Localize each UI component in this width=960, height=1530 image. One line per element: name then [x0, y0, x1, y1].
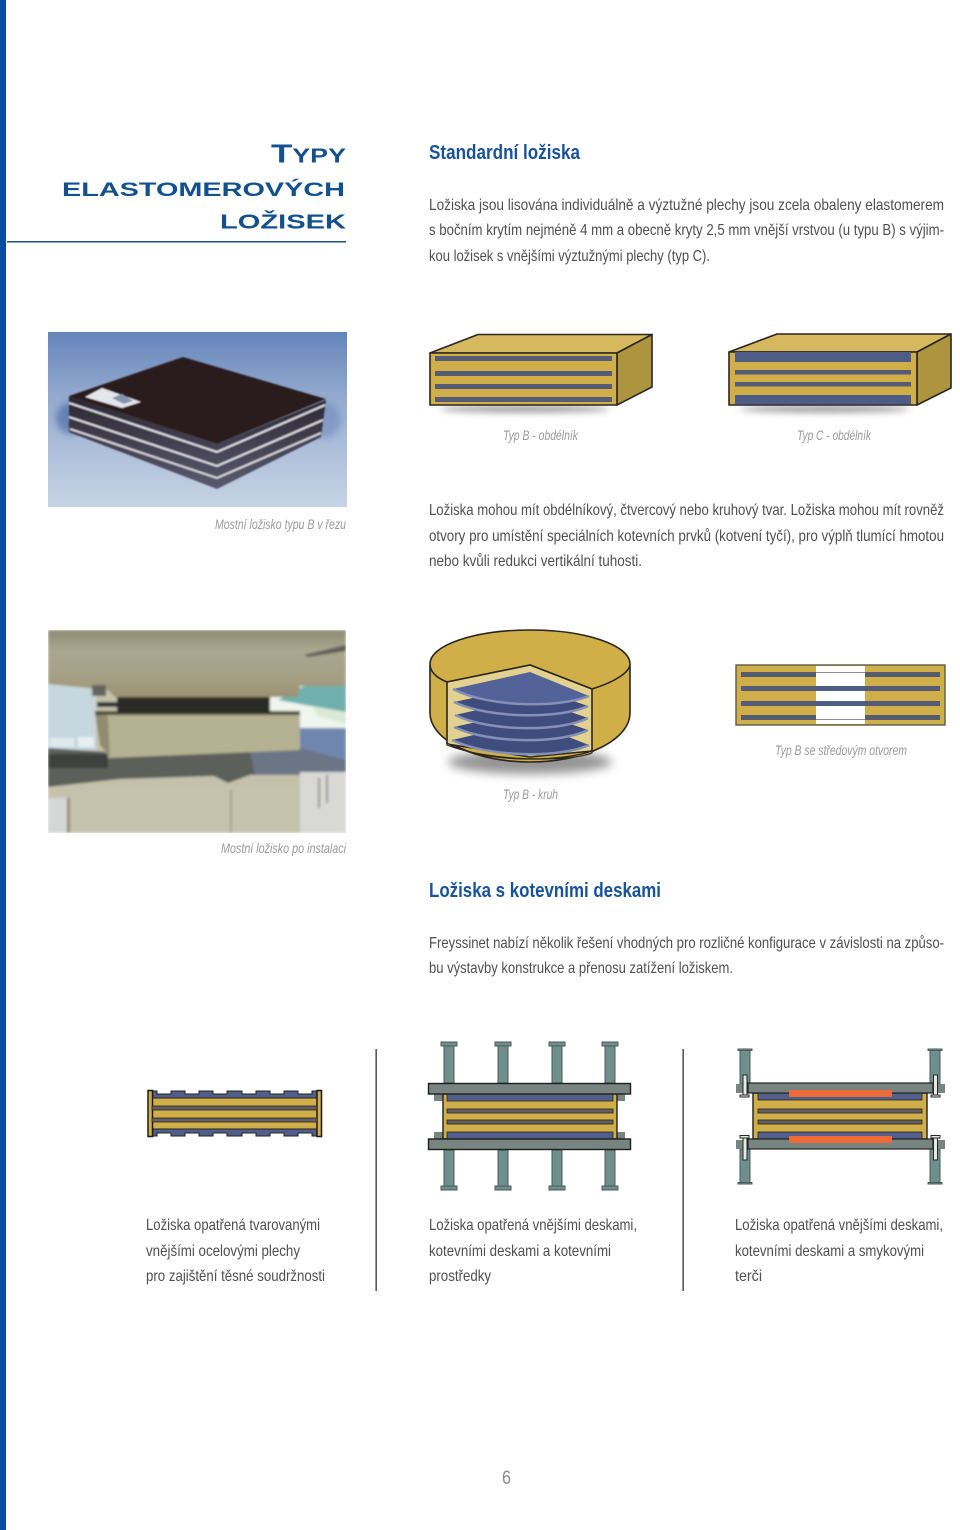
shear plate top [789, 1090, 892, 1097]
caption: photo 1: Mostní ložisko typu B v řezu [215, 516, 346, 532]
left page bar [0, 0, 6, 1530]
text block: intro: kou ložisek s vnějšími výztužnými plechy (typ C). [429, 248, 710, 265]
text block: anchor plates intro [429, 934, 944, 977]
text block: column 2: kotevními deskami a kotevními [429, 1243, 611, 1260]
heading: standard bearings: Standardní ložiska [429, 142, 581, 164]
caption: photo 2: Mostní ložisko po instalaci [221, 840, 347, 856]
divider 2 [682, 1049, 684, 1291]
diagram: type B rectangle [430, 334, 652, 412]
diagram: type B circular cutaway [430, 630, 630, 774]
diagram: type C rectangle [729, 334, 951, 412]
caption: type B with central hole: Typ B se středovým otvorem [775, 742, 907, 758]
text block: column 3: terči [735, 1268, 762, 1285]
shear plate bottom [789, 1136, 892, 1143]
text block: shapes [429, 502, 944, 570]
text block: intro [429, 197, 944, 265]
diagram: bearing with anchor plates and anchors [428, 1042, 630, 1190]
heading: bearings with anchor plates: Ložiska s kotevními deskami [429, 880, 661, 902]
title underline [7, 241, 346, 242]
text block: column 3: kotevními deskami a smykovými [735, 1243, 924, 1260]
text block: column 1: Ložiska opatřená tvarovanými [146, 1217, 320, 1234]
diagram: bearing with profiled outer plates [148, 1090, 322, 1136]
text block: column 3 [735, 1217, 943, 1285]
text block: column 1: vnějšími ocelovými plechy [146, 1243, 300, 1260]
caption: type C rectangle: Typ C - obdélník [797, 427, 872, 443]
text block: anchor plates intro: bu výstavby konstrukce a přenosu zatížení ložiskem. [429, 960, 733, 977]
text block: shapes: nebo kvůli redukci vertikální tuhosti. [429, 552, 642, 570]
text block: column 2: prostředky [429, 1268, 491, 1285]
diagram: type B with central hole [736, 665, 945, 725]
page number: 6 [502, 1468, 511, 1489]
title: LOŽISEK [220, 210, 347, 234]
diagram: bearing with anchor plates and shear studs [736, 1049, 945, 1184]
photo: type B bearing section [48, 332, 347, 507]
caption: type B circle: Typ B - kruh [503, 786, 558, 802]
caption: type B rectangle: Typ B - obdélník [503, 427, 579, 443]
photo: installed bridge bearing [48, 630, 346, 833]
title: ELASTOMEROVÝCH [62, 177, 345, 201]
text block: column 2 [429, 1217, 637, 1285]
title [62, 138, 347, 234]
text block: column 1: pro zajištění těsné soudržnosti [146, 1268, 325, 1285]
text block: column 2: Ložiska opatřená vnějšími deskami, [429, 1217, 637, 1234]
text block: column 1 [146, 1217, 325, 1285]
divider 1 [376, 1049, 377, 1291]
title: T YPY [271, 138, 347, 168]
